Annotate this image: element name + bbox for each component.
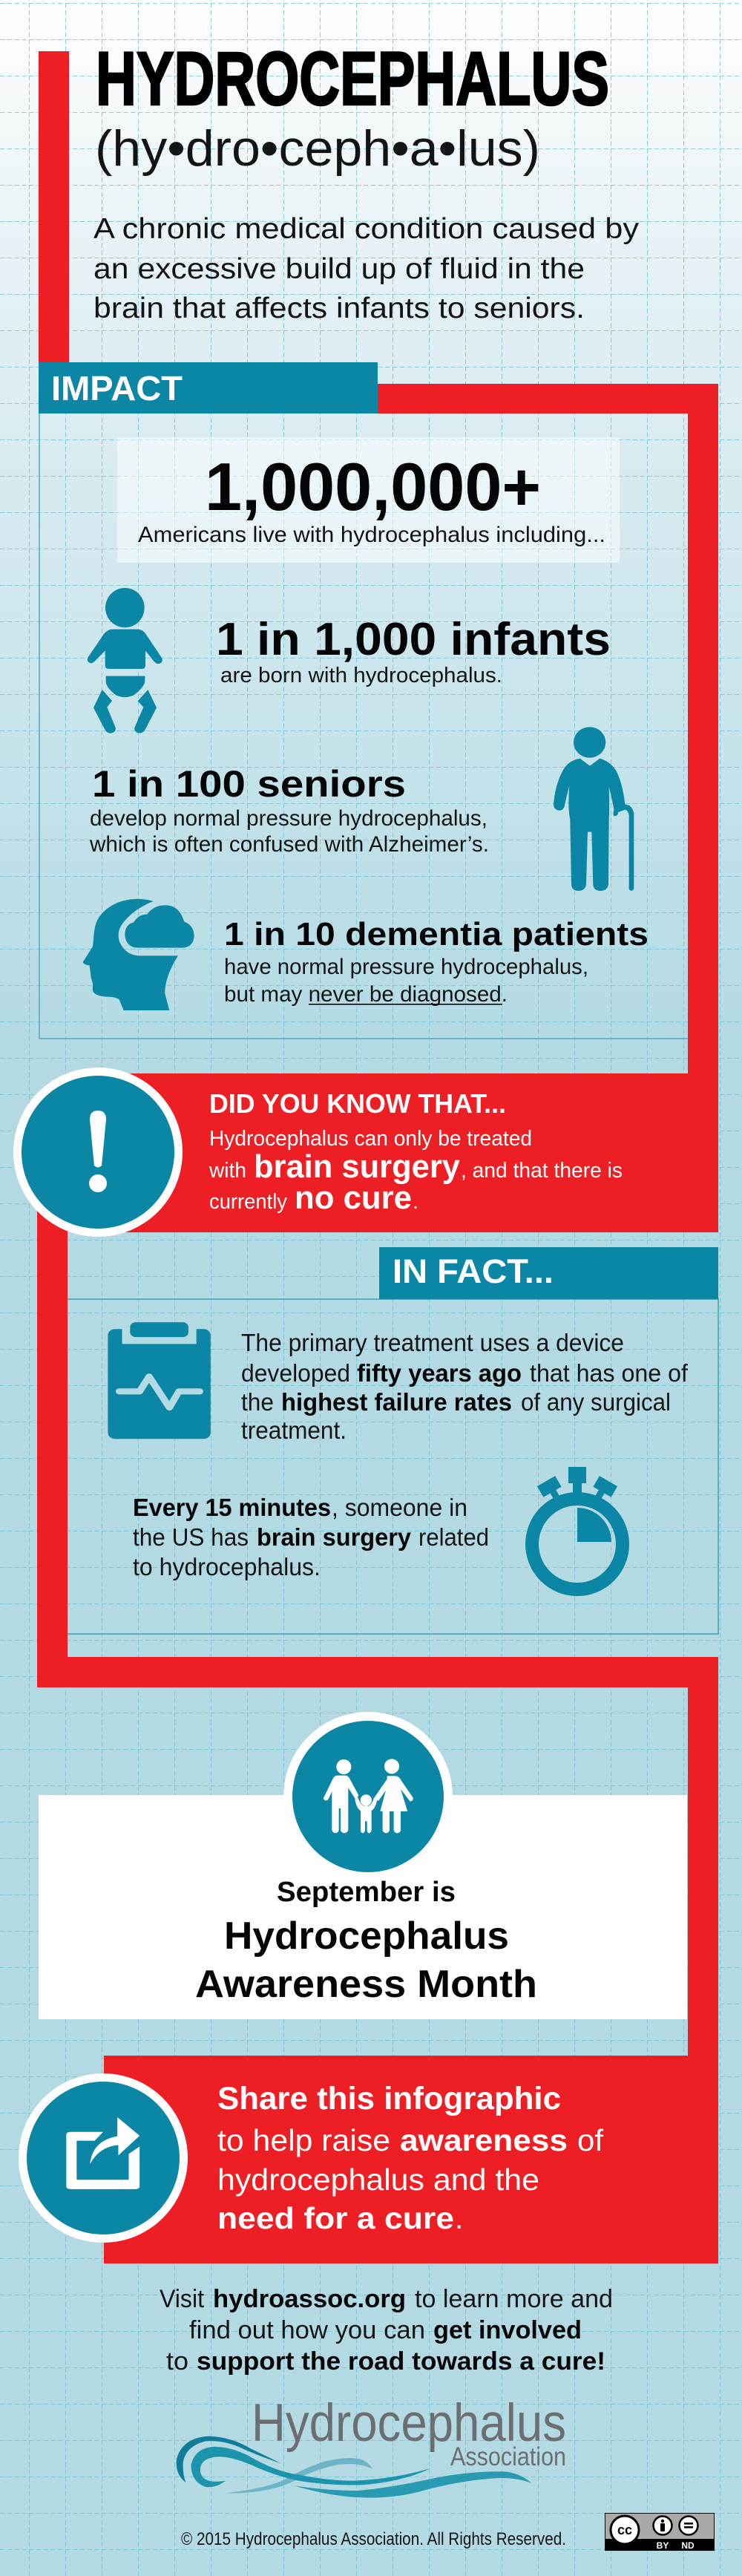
treatment text: highest failure rates: [281, 1388, 512, 1416]
share text: of: [577, 2123, 604, 2157]
in fact heading tab: [379, 1247, 718, 1299]
definition text: an excessive build up of fluid in the: [93, 253, 585, 285]
icon: exclamation badge: [13, 1068, 183, 1237]
red path connector: [37, 51, 718, 2058]
did you know text: brain surgery: [254, 1148, 461, 1185]
awareness text: [195, 1877, 537, 2006]
share text: to help raise: [217, 2123, 390, 2157]
visit website text: to: [166, 2347, 188, 2376]
treatment text: fifty years ago: [357, 1359, 522, 1387]
surgery frequency text: related: [418, 1523, 489, 1551]
definition text: brain that affects infants to seniors.: [93, 292, 585, 324]
icon: baby: [88, 588, 162, 733]
visit website text: Visit: [160, 2285, 205, 2313]
treatment text: the: [241, 1388, 274, 1416]
visit website text: support the road towards a cure!: [197, 2347, 605, 2376]
treatment text: of any surgical: [521, 1388, 671, 1416]
visit website text: to learn more and: [415, 2285, 613, 2313]
creative commons badge: ND: [681, 2540, 695, 2551]
stat: dementia patients: but may never be diagnosed.: [224, 982, 508, 1007]
share text: Share this infographic: [217, 2081, 561, 2116]
did you know text: with: [209, 1159, 246, 1183]
stat: infants: are born with hydrocephalus.: [220, 664, 502, 687]
stat box: one million: Americans live with hydrocephalus including...: [138, 523, 605, 547]
icon: family badge: [283, 1712, 453, 1881]
icon: stopwatch: [532, 1467, 623, 1589]
share text: hydrocephalus and the: [217, 2163, 539, 2197]
treatment text: treatment.: [241, 1416, 347, 1444]
creative commons badge: cc: [617, 2523, 632, 2537]
family figures: [324, 1759, 413, 1833]
logo: hydrocephalus association: [177, 2394, 566, 2497]
visit website text: get involved: [433, 2316, 582, 2344]
panel: did you know: [13, 1068, 718, 1237]
surgery frequency text: brain surgery: [257, 1523, 412, 1551]
logo: hydrocephalus association: Association: [450, 2442, 566, 2471]
surgery frequency text: Every 15 minutes: [133, 1494, 331, 1521]
surgery frequency text: [133, 1494, 489, 1580]
share text: [217, 2081, 604, 2235]
did you know text: Hydrocephalus can only be treated: [209, 1127, 532, 1151]
surgery frequency text: to hydrocephalus.: [133, 1553, 321, 1580]
panel: in fact: [68, 1247, 718, 1634]
impact heading tab: IMPACT: [51, 369, 183, 408]
did you know text: no cure: [295, 1180, 412, 1216]
awareness text: Awareness Month: [195, 1963, 537, 2006]
stat: infants: 1 in 1,000 infants: [216, 614, 611, 665]
did you know text: , and that there is: [461, 1159, 623, 1183]
did you know text: [209, 1088, 623, 1216]
share text: need for a cure: [217, 2201, 454, 2235]
surgery frequency text: , someone in: [332, 1494, 467, 1521]
treatment text: [241, 1329, 689, 1444]
did you know text: .: [413, 1190, 418, 1214]
stat box: one million: 1,000,000+: [205, 450, 541, 525]
panel: share call to action: [19, 2056, 718, 2263]
definition text: A chronic medical condition caused by: [93, 213, 640, 245]
logo: hydrocephalus association: Hydrocephalus: [252, 2394, 566, 2453]
impact heading tab: [39, 362, 378, 413]
treatment text: developed: [241, 1359, 350, 1387]
stat: dementia patients: [224, 916, 649, 1007]
share text: .: [455, 2201, 463, 2235]
did you know text: currently: [209, 1190, 287, 1214]
icon: head with cloud: [83, 899, 194, 1010]
panel: impact: [39, 362, 688, 1039]
visit website text: hydroassoc.org: [213, 2285, 406, 2313]
stat box: one million: [117, 437, 620, 563]
stat: infants: [216, 614, 611, 687]
stat: seniors: [89, 763, 489, 857]
icon: clipboard: [108, 1322, 211, 1439]
share text: awareness: [400, 2123, 568, 2157]
did you know text: DID YOU KNOW THAT...: [209, 1088, 506, 1119]
stat: seniors: develop normal pressure hydrocephalus,: [90, 806, 487, 831]
copyright: © 2015 Hydrocephalus Association. All Rights Reserved.: [181, 2529, 566, 2549]
treatment text: The primary treatment uses a device: [241, 1329, 624, 1356]
creative commons badge: BY: [657, 2540, 669, 2551]
stat: dementia patients: have normal pressure hydrocephalus,: [224, 955, 588, 979]
icon: senior with cane: [554, 727, 634, 891]
stat: dementia patients: 1 in 10 dementia patients: [224, 916, 649, 952]
visit website text: [160, 2285, 613, 2376]
surgery frequency text: the US has: [133, 1523, 249, 1551]
awareness text: Hydrocephalus: [224, 1915, 509, 1958]
creative commons badge: [605, 2513, 715, 2551]
stat: seniors: which is often confused with Alzheimer’s.: [89, 832, 489, 857]
definition text: [93, 213, 640, 324]
treatment text: that has one of: [530, 1359, 689, 1387]
awareness text: September is: [277, 1877, 456, 1908]
visit website text: find out how you can: [189, 2316, 425, 2344]
panel: awareness month: [39, 1712, 687, 2019]
in fact heading tab: IN FACT...: [393, 1252, 554, 1290]
stat: seniors: 1 in 100 seniors: [92, 763, 406, 805]
icon: share badge: [19, 2073, 188, 2243]
pronunciation: (hy•dro•ceph•a•lus): [95, 120, 540, 177]
